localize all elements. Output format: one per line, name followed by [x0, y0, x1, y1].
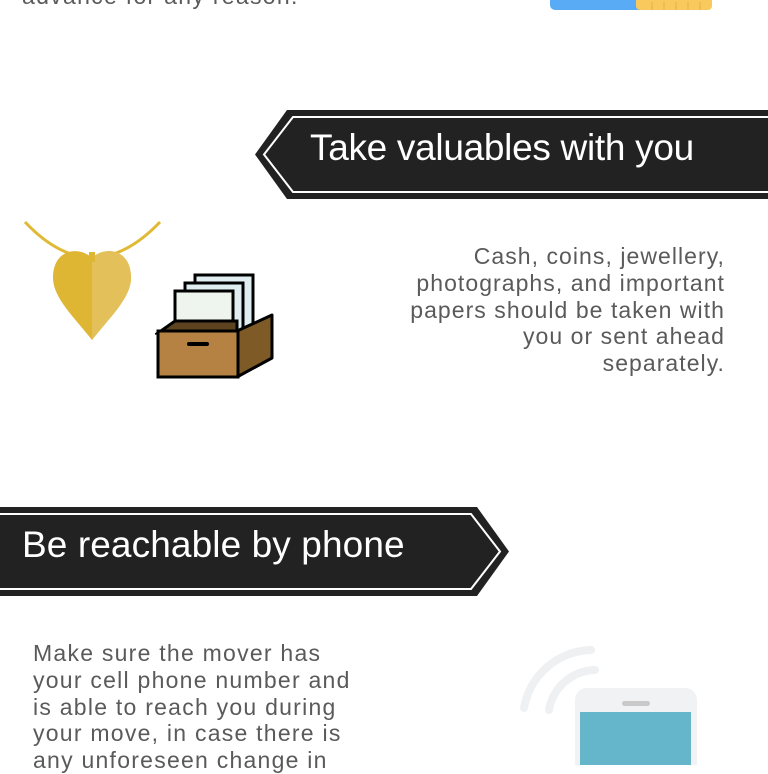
text: valuables description: photographs, and important	[416, 270, 725, 296]
text: valuables description: you or sent ahead	[523, 323, 725, 349]
text: phone description: your move, in case there is	[33, 720, 342, 746]
text: phone description: Make sure the mover has	[33, 640, 321, 666]
text: valuables description: papers should be taken with	[410, 297, 725, 323]
heading text: Take valuables with you	[310, 127, 694, 168]
text: valuables description: separately.	[603, 350, 725, 376]
text: phone description: your cell phone number and	[33, 667, 351, 693]
heading text: Be reachable by phone	[22, 524, 405, 565]
icon: box of papers	[155, 274, 274, 379]
icon: top cut-off bar	[550, 0, 712, 10]
text: phone description: is able to reach you during	[33, 694, 337, 720]
banner: Take valuables with you	[255, 110, 768, 199]
text: valuables description: Cash, coins, jewellery,	[474, 243, 725, 269]
text: phone description	[33, 640, 351, 773]
text: valuables description	[410, 243, 725, 376]
icon: phone with signal	[520, 646, 697, 765]
icon: heart necklace	[24, 221, 161, 340]
text: phone description: any unforeseen change in	[33, 747, 328, 773]
banner: Be reachable by phone	[0, 507, 509, 596]
